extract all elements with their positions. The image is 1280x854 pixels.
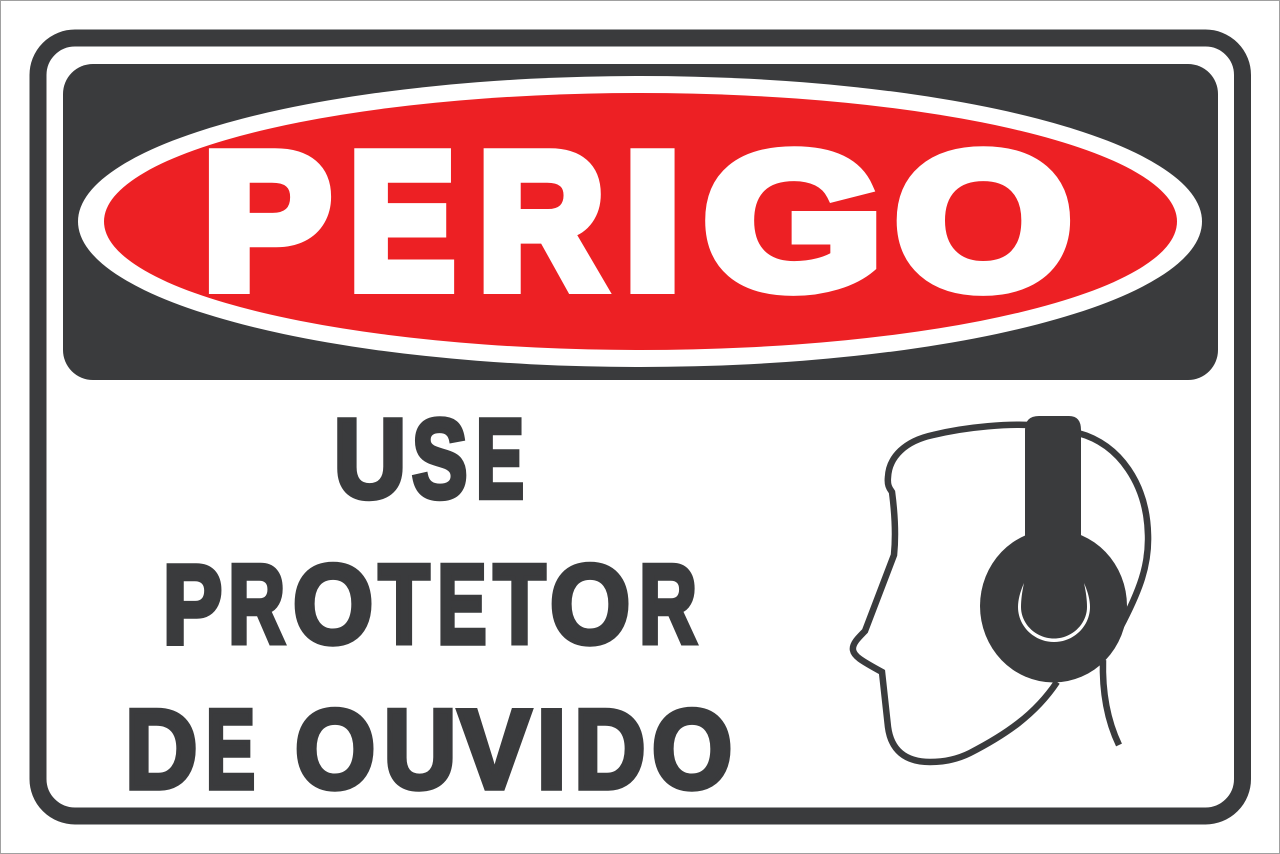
text line: PROTETOR: R xyxy=(639,542,697,667)
heading: PERIGO: R xyxy=(478,112,604,328)
text line: PROTETOR: E xyxy=(437,542,487,667)
icon: head with ear protector xyxy=(853,416,1148,762)
head outline xyxy=(853,425,1057,762)
ear cup xyxy=(980,530,1127,682)
instruction text xyxy=(125,396,732,812)
text line: DE OUVIDO: O xyxy=(295,687,375,812)
text line: DE OUVIDO: D xyxy=(125,687,197,812)
ear cup inner ring xyxy=(1018,583,1090,642)
text line: PROTETOR: T xyxy=(493,542,546,667)
text line: PROTETOR: O xyxy=(550,542,630,667)
text line: PROTETOR: R xyxy=(228,542,285,667)
headband xyxy=(1025,416,1081,560)
header panel xyxy=(63,64,1218,380)
red oval xyxy=(104,93,1177,350)
text line: PROTETOR: T xyxy=(378,542,430,667)
text line: USE: E xyxy=(476,396,524,521)
text line: PROTETOR: O xyxy=(293,542,373,667)
heading: PERIGO: G xyxy=(704,112,883,328)
text line: PROTETOR: P xyxy=(163,542,222,667)
heading: PERIGO: E xyxy=(349,112,455,328)
text line: DE OUVIDO: D xyxy=(574,687,645,812)
text line: USE: S xyxy=(412,396,468,521)
text line: DE OUVIDO: O xyxy=(652,687,732,812)
text line: USE: U xyxy=(334,396,406,521)
heading: PERIGO: I xyxy=(624,112,682,328)
back of head xyxy=(1078,433,1148,628)
heading: PERIGO: P xyxy=(202,112,331,328)
text line: DE OUVIDO: E xyxy=(206,687,255,812)
text line: DE OUVIDO: U xyxy=(384,687,456,812)
neck xyxy=(1103,660,1119,745)
heading: PERIGO: O xyxy=(895,112,1072,328)
text line: DE OUVIDO: I xyxy=(536,687,567,812)
white oval xyxy=(78,76,1202,367)
text line: DE OUVIDO: V xyxy=(458,687,531,812)
